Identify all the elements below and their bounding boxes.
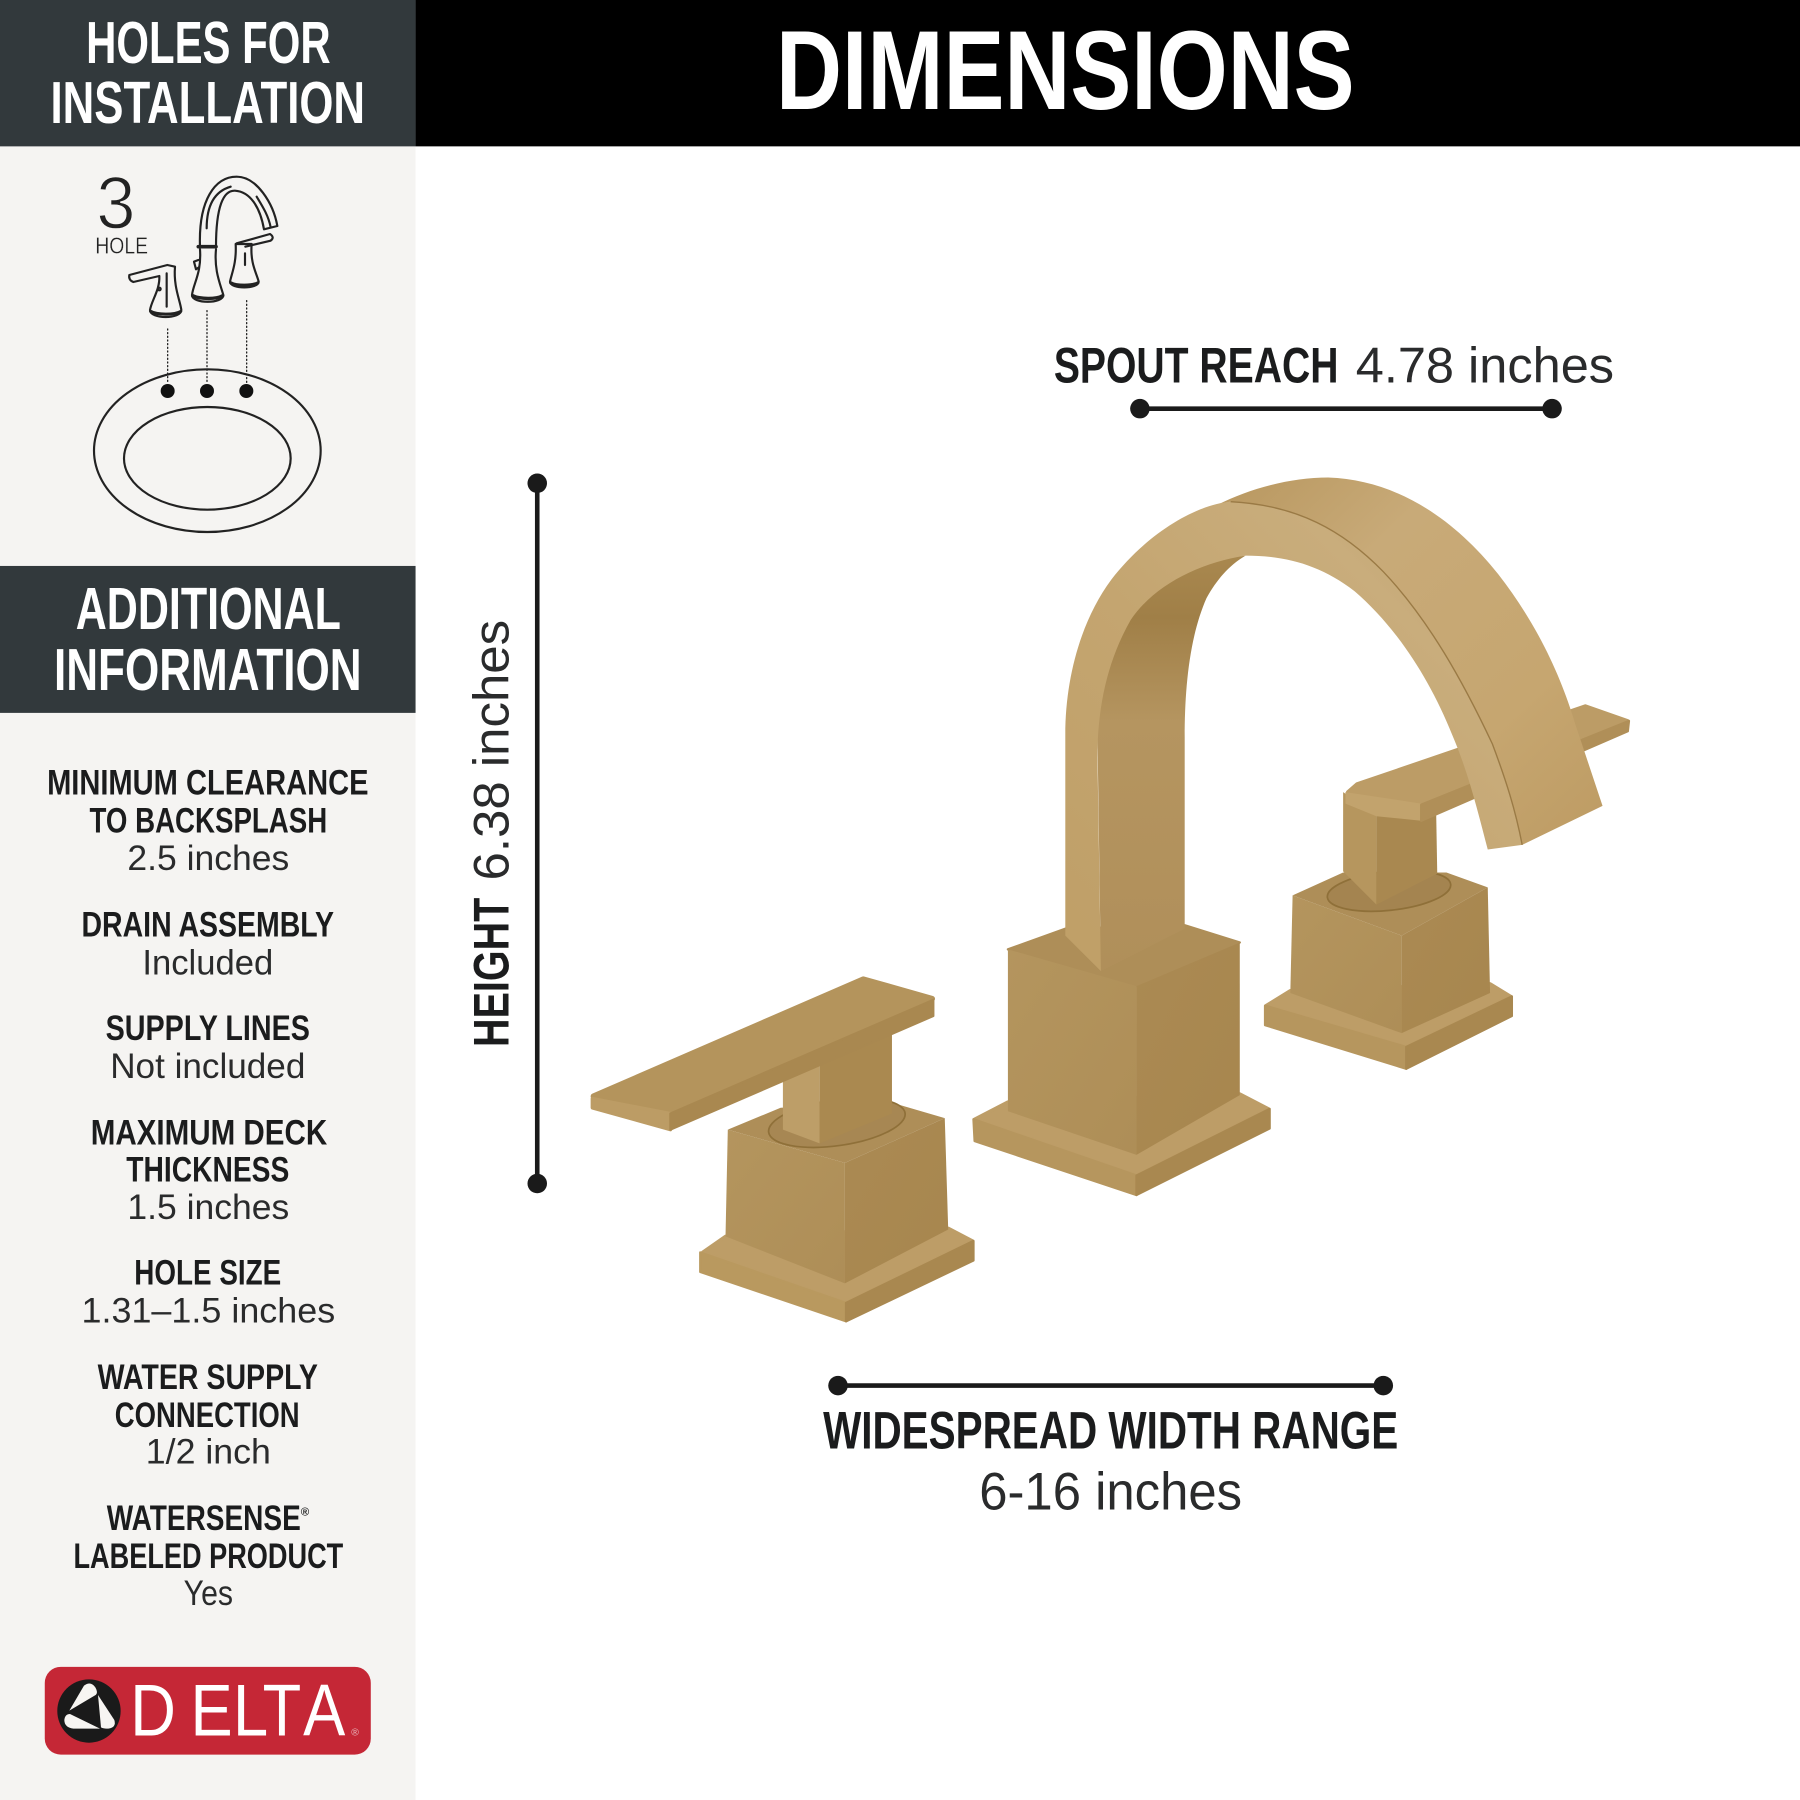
header: additional information <box>0 566 416 713</box>
dimension: spout reach <box>1054 336 1614 418</box>
header: holes for installation: INSTALLATION <box>51 69 365 136</box>
spec: water supply connection <box>98 1357 318 1472</box>
spec: supply lines: SUPPLY LINES <box>106 1008 310 1048</box>
spec: drain assembly: DRAIN ASSEMBLY <box>82 905 334 945</box>
product: gold faucet <box>592 478 1629 1321</box>
dimension: widespread width range: WIDESPREAD WIDTH RANGE <box>823 1402 1398 1461</box>
header: additional information: INFORMATION <box>54 636 362 703</box>
spec: maximum deck thickness <box>91 1113 327 1227</box>
spec: watersense: WATERSENSE <box>107 1498 301 1538</box>
dimension: height: HEIGHT <box>463 898 520 1047</box>
spec: hole size: 1.31–1.5 inches <box>82 1290 335 1330</box>
spec: hole size: HOLE SIZE <box>134 1253 281 1293</box>
icon: three hole faucet and sink <box>94 160 321 532</box>
dimension: widespread width range: 6-16 inches <box>979 1463 1242 1522</box>
dimension: height: 6.38 inches <box>463 620 520 880</box>
icon: three hole faucet and sink: 3 <box>96 160 135 244</box>
icon: three hole faucet and sink: HOLE <box>95 233 148 259</box>
spec: watersense: Yes <box>184 1573 233 1613</box>
right handle <box>1265 706 1629 1069</box>
dimension: spout reach: 4.78 inches <box>1356 336 1614 393</box>
spec: watersense <box>73 1498 343 1613</box>
spec: water supply connection: CONNECTION <box>115 1395 300 1435</box>
header: additional information: ADDITIONAL <box>76 575 341 642</box>
spec: supply lines: Not included <box>110 1046 305 1086</box>
spec: watersense: ® <box>301 1506 310 1518</box>
spec: supply lines <box>106 1008 310 1086</box>
header: holes for installation <box>0 0 416 146</box>
title: dimensions <box>416 0 1800 146</box>
logo: delta: DELTA <box>130 1669 346 1752</box>
spec: maximum deck thickness: MAXIMUM DECK <box>91 1113 327 1153</box>
title: dimensions: DIMENSIONS <box>776 7 1355 133</box>
spec: maximum deck thickness: THICKNESS <box>126 1149 289 1189</box>
spec: maximum deck thickness: 1.5 inches <box>127 1187 289 1227</box>
spec: watersense: LABELED PRODUCT <box>73 1536 343 1576</box>
spec: minimum clearance: TO BACKSPLASH <box>90 800 327 840</box>
spec: minimum clearance: 2.5 inches <box>127 838 289 878</box>
dimension: height <box>463 474 547 1193</box>
logo: delta <box>45 1667 371 1755</box>
spec: water supply connection: WATER SUPPLY <box>98 1357 318 1397</box>
spec: drain assembly: Included <box>142 943 273 983</box>
panel: left sidebar <box>0 0 416 1800</box>
spec: minimum clearance <box>47 762 368 878</box>
header: holes for installation: HOLES FOR <box>86 9 331 76</box>
spec: minimum clearance: MINIMUM CLEARANCE <box>47 762 368 802</box>
left handle <box>592 979 973 1321</box>
logo: delta: ® <box>351 1728 359 1739</box>
dimension: widespread width range <box>823 1376 1398 1522</box>
dimension: spout reach: SPOUT REACH <box>1054 336 1339 393</box>
spec: hole size <box>82 1253 335 1330</box>
center spout <box>973 478 1603 1195</box>
spec: water supply connection: 1/2 inch <box>146 1432 271 1472</box>
spec: drain assembly <box>82 905 334 983</box>
